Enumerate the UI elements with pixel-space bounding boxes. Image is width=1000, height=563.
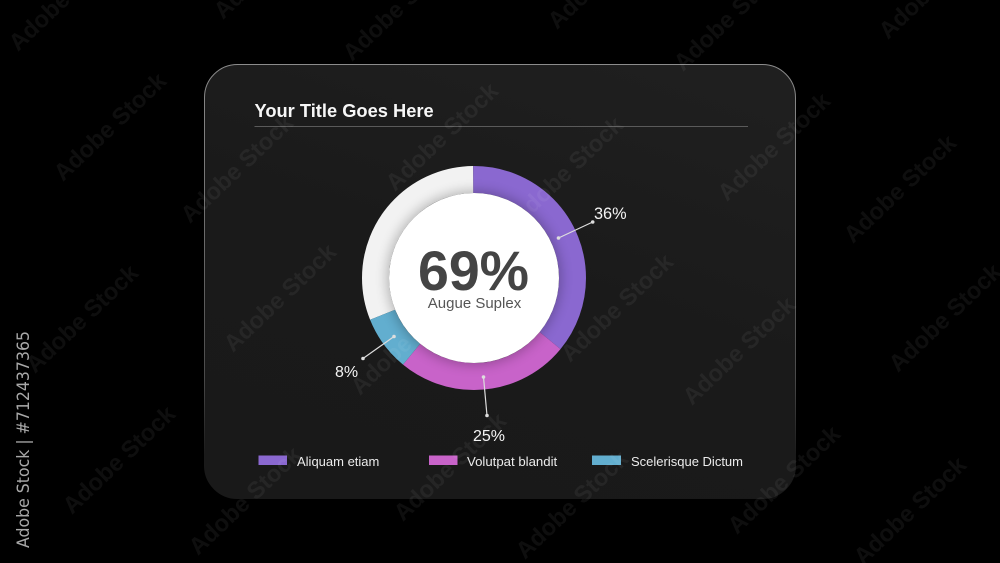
callout: 8% xyxy=(335,335,396,381)
stock id label: Adobe Stock | #712437365 xyxy=(14,331,34,548)
watermark pattern: Adobe Stock xyxy=(58,401,181,519)
watermark pattern: Adobe Stock xyxy=(346,282,469,400)
segment: remainder xyxy=(376,180,572,376)
callout: 8%: 8% xyxy=(335,364,358,381)
legend item: Aliquam etiam xyxy=(258,454,379,469)
segment: blue 8% xyxy=(376,180,572,376)
watermark pattern: Adobe Stock xyxy=(21,260,144,378)
watermark pattern: Adobe Stock xyxy=(219,239,342,357)
inner circle shadow xyxy=(387,191,561,365)
panel: chart card xyxy=(204,64,796,498)
title: Your Title Goes Here xyxy=(254,100,434,121)
donut chart xyxy=(376,180,572,376)
legend item: Volutpat blandit: Volutpat blandit xyxy=(467,454,558,469)
watermark pattern: Adobe Stock xyxy=(511,446,634,563)
center value: 69% xyxy=(418,240,529,302)
watermark pattern: Adobe Stock xyxy=(556,249,679,367)
watermark pattern: Adobe Stock xyxy=(184,442,307,560)
watermark pattern: Adobe Stock xyxy=(713,88,836,206)
callout: 25%: 25% xyxy=(473,428,505,445)
watermark pattern: Adobe Stock xyxy=(381,78,504,196)
watermark pattern: Adobe Stock xyxy=(176,110,299,228)
legend xyxy=(258,454,743,469)
watermark pattern: Adobe Stock xyxy=(389,408,512,526)
center label: Augue Suplex xyxy=(428,295,522,312)
watermark pattern: Adobe Stock xyxy=(839,130,962,248)
watermark pattern: Adobe Stock xyxy=(506,112,629,230)
inner white circle xyxy=(389,193,559,363)
watermark pattern: Adobe Stock xyxy=(723,421,846,539)
watermark pattern: Adobe Stock xyxy=(49,68,172,186)
legend item: Scelerisque Dictum: Scelerisque Dictum xyxy=(631,454,743,469)
callout: 25% xyxy=(473,375,505,445)
callout: 36%: 36% xyxy=(594,205,627,223)
callout: 36% xyxy=(557,205,627,240)
segment: pink 25% xyxy=(376,180,572,376)
segment: purple 36% xyxy=(376,180,572,376)
legend item: Aliquam etiam: Aliquam etiam xyxy=(297,454,379,469)
watermark pattern: Adobe Stock xyxy=(678,292,801,410)
